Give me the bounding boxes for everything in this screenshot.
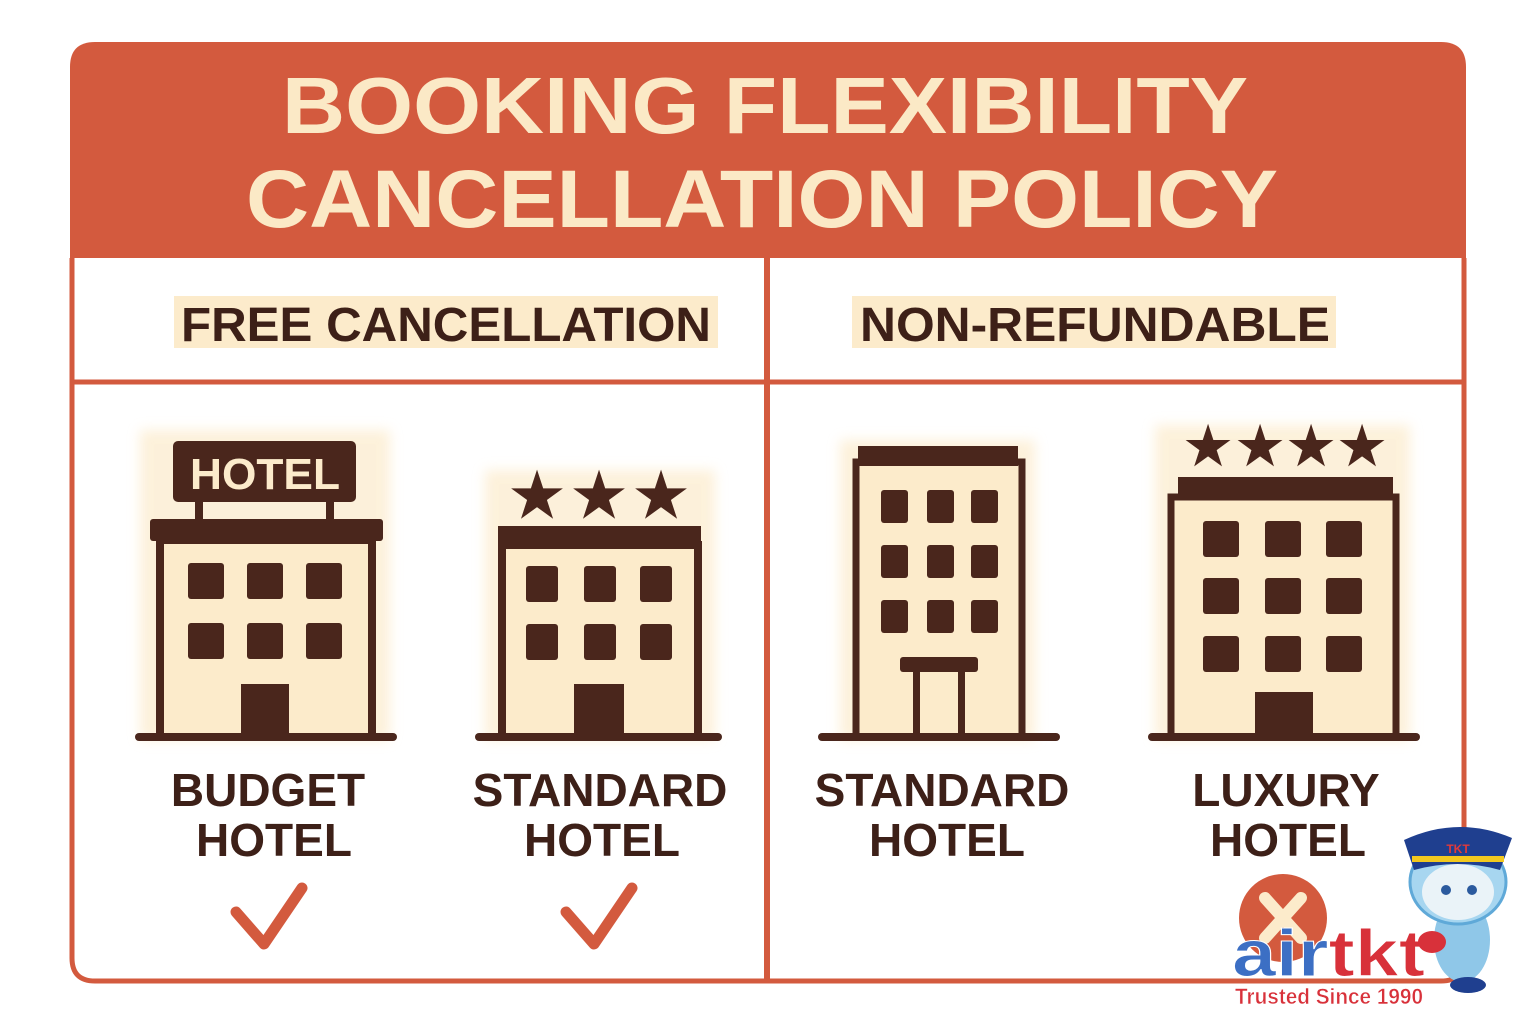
icon: standard hotel (free): [475, 462, 722, 741]
label: standard hotel (free): [473, 764, 727, 866]
icon: luxury hotel: ★: [1185, 418, 1231, 476]
icon: standard hotel (free): ★: [572, 462, 626, 529]
icon: budget hotel: [135, 430, 397, 741]
icon: standard hotel (free): ★: [634, 462, 688, 529]
heading: free cancellation: FREE CANCELLATION: [181, 299, 711, 352]
label: budget hotel: HOTEL: [196, 814, 352, 866]
title: CANCELLATION POLICY: [246, 154, 1278, 245]
icon: luxury hotel: ★: [1339, 418, 1385, 476]
label: standard hotel (non-refundable): STANDARD: [815, 764, 1069, 816]
icon: budget hotel: HOTEL: [190, 450, 340, 499]
label: luxury hotel: [1192, 764, 1380, 866]
icon: luxury hotel: [1148, 418, 1420, 741]
icon: standard hotel (non-refundable): [818, 440, 1060, 741]
label: standard hotel (free): STANDARD: [473, 764, 727, 816]
label: budget hotel: [171, 764, 365, 866]
label: luxury hotel: LUXURY: [1192, 764, 1380, 816]
icon: mascot: TKT: [1446, 842, 1470, 856]
icon: check budget: [236, 888, 302, 944]
label: standard hotel (free): HOTEL: [524, 814, 680, 866]
title: BOOKING FLEXIBILITY: [282, 61, 1248, 150]
label: budget hotel: BUDGET: [171, 764, 365, 816]
title: [246, 61, 1278, 245]
heading: non-refundable: NON-REFUNDABLE: [860, 299, 1330, 352]
label: luxury hotel: HOTEL: [1210, 814, 1366, 866]
icon: cross: [1239, 874, 1327, 962]
logo: airtkt: airtkt: [1232, 916, 1425, 990]
label: standard hotel (non-refundable): [815, 764, 1069, 866]
icon: luxury hotel: ★: [1288, 418, 1334, 476]
label: standard hotel (non-refundable): HOTEL: [869, 814, 1025, 866]
icon: mascot: [1404, 827, 1512, 993]
logo: airtkt: Trusted Since 1990: [1235, 984, 1423, 1009]
icon: standard hotel (free): ★: [510, 462, 564, 529]
icon: check standard: [566, 888, 632, 944]
icon: luxury hotel: ★: [1237, 418, 1283, 476]
